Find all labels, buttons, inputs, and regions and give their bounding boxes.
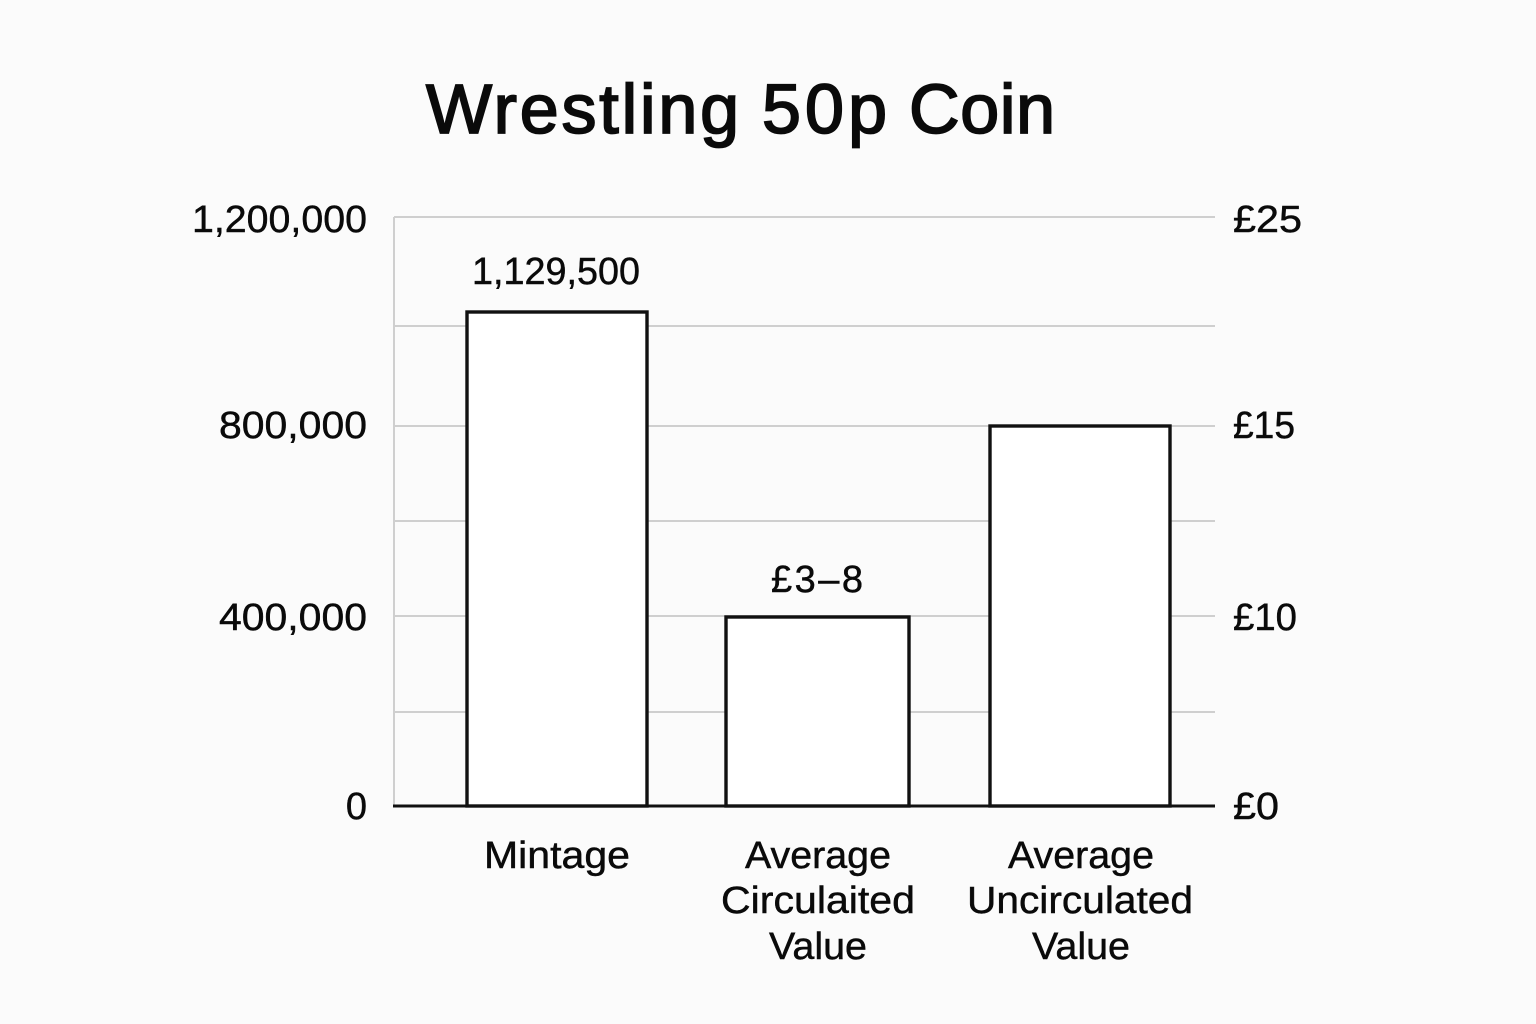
bar: average circulated value (726, 617, 909, 806)
title: Coin (909, 70, 1055, 148)
title: Wrestling (426, 70, 739, 148)
category label: average circulated value (721, 835, 915, 968)
bar: average uncirculated value (990, 426, 1170, 806)
category label: average circulated value: Average (745, 835, 891, 877)
category label: average uncirculated value: Average (1008, 835, 1154, 877)
category label: average uncirculated value (967, 835, 1193, 968)
title: 50p (762, 70, 887, 148)
right axis labels: £10 (1233, 597, 1297, 639)
left axis labels: 800,000 (219, 405, 367, 447)
right axis labels: £15 (1233, 405, 1295, 447)
bar chart (192, 199, 1302, 968)
left axis labels: 0 (346, 786, 367, 828)
category label: average uncirculated value: Uncirculated (967, 880, 1193, 922)
right axis labels: £0 (1233, 786, 1279, 828)
left axis labels: 1,200,000 (192, 199, 367, 241)
category label: average uncirculated value: Value (1032, 926, 1130, 968)
value label: mintage: 1,129,500 (472, 251, 640, 293)
right axis labels (1233, 199, 1302, 828)
bar: mintage (467, 312, 647, 806)
left axis labels (192, 199, 367, 828)
category label: average circulated value: Value (769, 926, 867, 968)
left axis labels: 400,000 (219, 597, 367, 639)
category label: average circulated value: Circulaited (721, 880, 915, 922)
right axis labels: £25 (1233, 199, 1302, 241)
category label: mintage: Mintage (484, 835, 630, 877)
value label: circulated: £3–8 (771, 559, 863, 601)
x axis line (393, 804, 1215, 808)
